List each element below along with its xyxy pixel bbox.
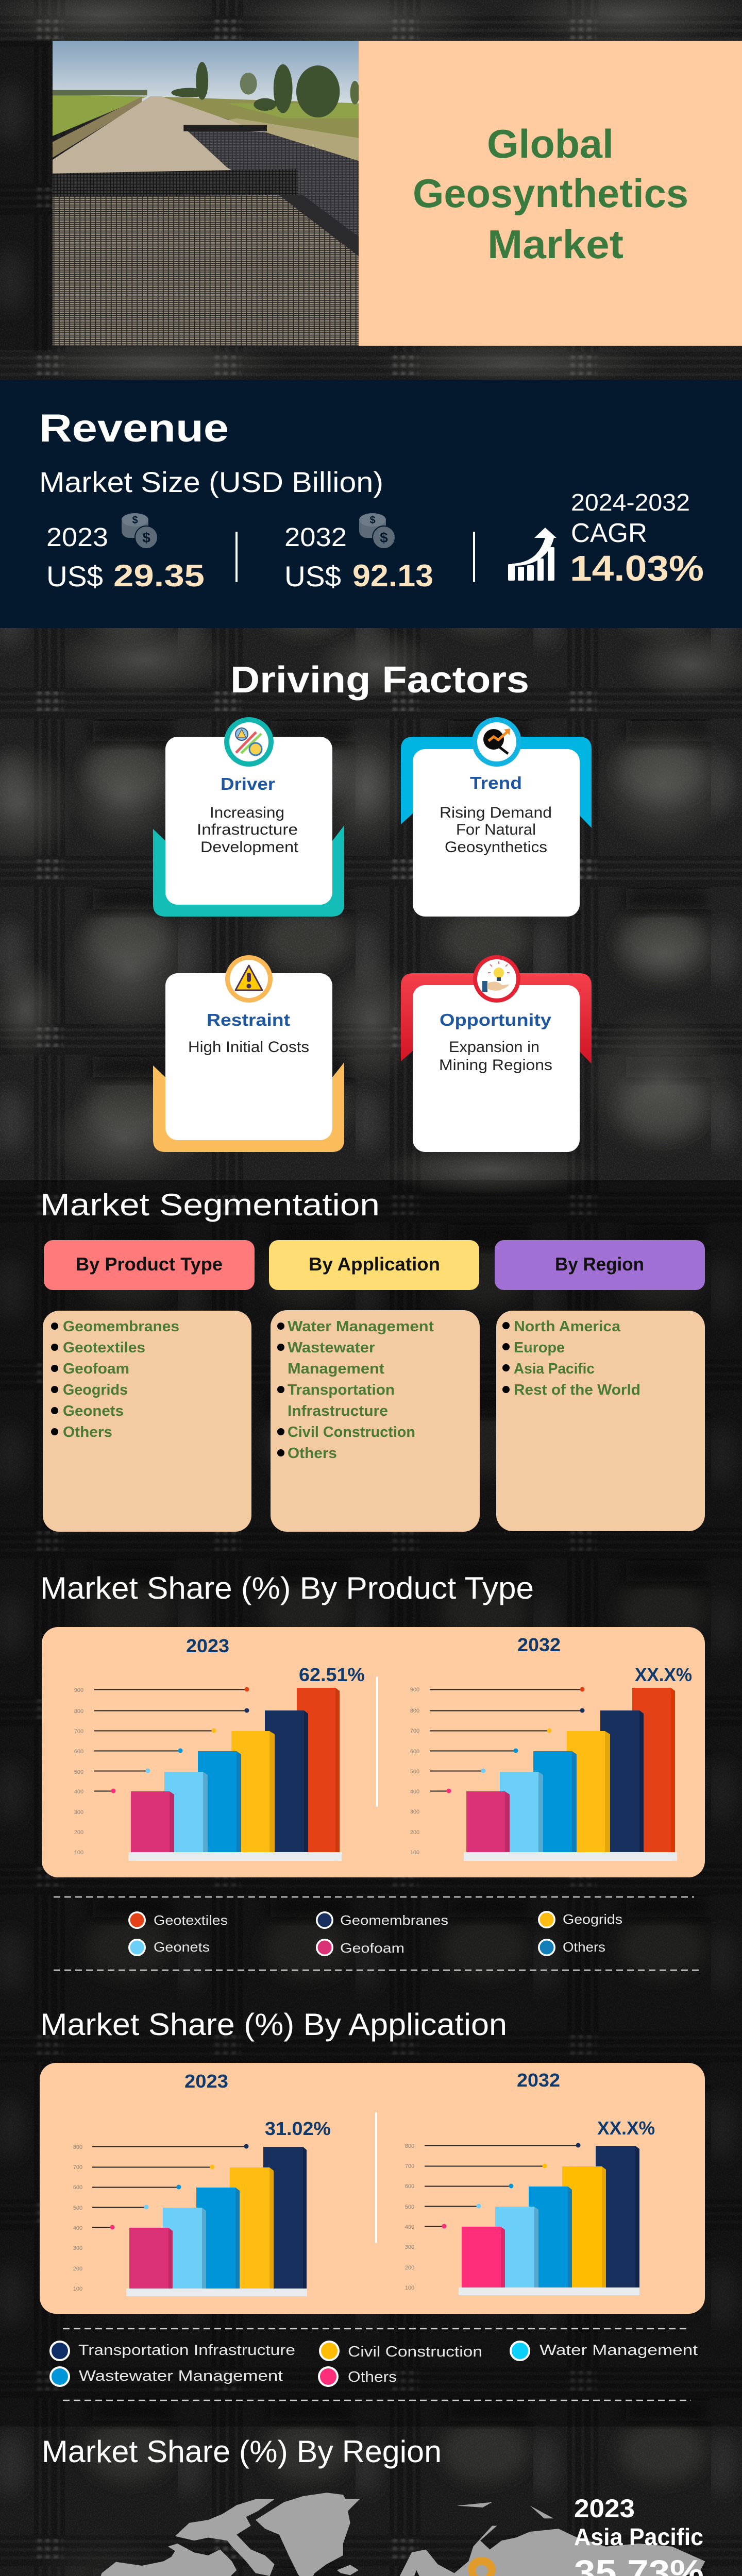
chart: product type 2032: 200 <box>410 1829 419 1836</box>
legend: product type <box>128 1911 622 1956</box>
stat: CAGR <box>570 489 704 588</box>
chart: product type 2023: 500 <box>74 1769 83 1775</box>
text: opportunity description: Mining Regions <box>439 1057 552 1074</box>
header panel: peach title block <box>359 41 742 346</box>
legend: application: Water Management <box>539 2342 698 2359</box>
list panel: applications: Civil Construction <box>288 1424 415 1440</box>
chart: application 2023: 300 <box>73 2245 82 2251</box>
list panel: applications: Water Management <box>288 1318 434 1335</box>
stat: CAGR: 14.03% <box>570 548 704 588</box>
title: Market <box>487 222 623 267</box>
list panel: applications: Transportation <box>288 1382 395 1398</box>
text: restraint description: High Initial Costs <box>188 1039 309 1056</box>
legend: product type: Geomembranes <box>340 1912 448 1928</box>
chart: product type 2032 <box>410 1634 692 1861</box>
heading: revenue: Revenue <box>39 406 229 450</box>
panel: application charts <box>40 2063 705 2314</box>
text: trend description <box>440 804 552 856</box>
chart: application 2032: 2032 <box>517 2070 560 2091</box>
text: trend description: Rising Demand <box>440 804 552 821</box>
icon: coins <box>122 513 158 549</box>
stat: 2032 revenue <box>284 513 433 593</box>
pin: europe <box>468 2557 496 2576</box>
chart: application 2023: 100 <box>73 2286 82 2292</box>
card: driver <box>153 717 344 917</box>
list panel: regions: North America <box>514 1318 621 1335</box>
heading: market share by product type: Market Share (%) By Product Type <box>40 1571 534 1605</box>
chart: application 2032: 700 <box>405 2163 414 2170</box>
list panel: product types: Geonets <box>63 1403 124 1419</box>
chart: application 2032: 100 <box>405 2285 414 2291</box>
title: Geosynthetics <box>413 171 688 216</box>
list panel: product types: Geofoam <box>63 1361 129 1377</box>
icon: driver gears and arrows <box>224 717 274 767</box>
text: driver description: Development <box>200 839 299 856</box>
legend: application: Civil Construction <box>348 2344 482 2360</box>
legend: product type: Others <box>563 1939 605 1955</box>
chart: application 2023: 800 <box>73 2144 82 2150</box>
text: trend description: For Natural <box>456 821 536 838</box>
chart: product type 2032: 500 <box>410 1769 419 1775</box>
legend: application: Transportation Infrastructure <box>78 2342 295 2359</box>
callout: asia pacific share <box>574 2494 704 2576</box>
chart: product type 2023: 800 <box>74 1708 83 1715</box>
text: opportunity description: Expansion in <box>449 1039 539 1056</box>
chart: product type 2032: 900 <box>410 1687 419 1693</box>
chart: application 2023: 400 <box>73 2225 82 2231</box>
text: driver description: Increasing <box>210 804 284 821</box>
panel: product type charts <box>42 1627 705 1877</box>
tab: by product type: By Product Type <box>76 1253 223 1275</box>
chart: product type 2023 <box>74 1635 365 1861</box>
legend: product type: Geonets <box>154 1939 210 1955</box>
title: Global <box>487 121 614 166</box>
heading: driver: Driver <box>221 774 275 793</box>
icon: coins: $ <box>380 530 388 546</box>
list panel: regions: Rest of the World <box>514 1382 640 1398</box>
text: driver description: Infrastructure <box>197 821 298 838</box>
icon: warning triangle <box>225 955 273 1003</box>
title <box>413 121 688 267</box>
icon: coins: $ <box>369 515 376 526</box>
chart: application 2032 <box>405 2070 655 2295</box>
text: opportunity description <box>439 1039 552 1074</box>
list panel: regions: Europe <box>514 1340 565 1356</box>
list panel: product types: Geogrids <box>63 1382 128 1398</box>
text: driver description <box>197 804 299 856</box>
legend: application <box>49 2341 698 2387</box>
list panel: regions: Asia Pacific <box>514 1361 595 1377</box>
chart: product type 2023: 200 <box>74 1829 83 1836</box>
list panel: applications: Wastewater <box>288 1340 375 1356</box>
chart: application 2023: 600 <box>73 2184 82 2191</box>
chart: application 2023: 2023 <box>184 2071 228 2092</box>
chart: product type 2032: 700 <box>410 1728 419 1734</box>
chart: product type 2023: 700 <box>74 1728 83 1735</box>
chart: product type 2023: 600 <box>74 1749 83 1755</box>
chart: application 2032: 400 <box>405 2224 414 2230</box>
callout: asia pacific share: 2023 <box>574 2494 635 2523</box>
legend: product type: Geotextiles <box>154 1912 228 1928</box>
hero photo: geogrid being rolled out on a road <box>53 41 360 346</box>
icon: trend magnifier <box>472 717 521 767</box>
heading: restraint: Restraint <box>207 1010 290 1029</box>
chart: product type 2023: 900 <box>74 1687 83 1693</box>
tab: by product type <box>44 1240 255 1290</box>
heading: driving factors: Driving Factors <box>230 659 529 701</box>
subheading: market size: Market Size (USD Billion) <box>39 466 383 498</box>
chart: application 2023: 700 <box>73 2164 82 2171</box>
icon: growth chart with arrow <box>508 528 556 581</box>
list panel: product types: Geomembranes <box>63 1318 179 1335</box>
chart: product type 2032: 400 <box>410 1789 419 1795</box>
heading: market share by application: Market Share (%) By Application <box>40 2007 507 2042</box>
chart: application 2023 <box>73 2071 331 2296</box>
stat: 2032 revenue: 92.13 <box>352 558 433 593</box>
chart: product type 2023: 300 <box>74 1809 83 1816</box>
list panel: product types: Others <box>63 1424 112 1440</box>
text: trend description: Geosynthetics <box>445 839 547 856</box>
stat: 2023 revenue: 29.35 <box>113 558 205 593</box>
icon: coins: $ <box>142 530 150 546</box>
legend: product type: Geogrids <box>563 1911 622 1927</box>
heading: market segmentation: Market Segmentation <box>40 1188 380 1222</box>
stat: 2032 revenue: US$ <box>284 560 341 592</box>
list panel: regions <box>496 1311 705 1531</box>
stat: 2023 revenue: US$ <box>46 560 103 592</box>
stat: CAGR: CAGR <box>571 518 647 548</box>
list panel: product types <box>43 1311 251 1532</box>
card: opportunity <box>401 955 592 1152</box>
chart: application 2032: 300 <box>405 2244 414 2250</box>
world map <box>99 2493 705 2576</box>
stat: 2032 revenue: 2032 <box>284 522 347 552</box>
chart: product type 2032: 800 <box>410 1708 419 1714</box>
list panel: applications <box>271 1310 480 1532</box>
chart: application 2032: 200 <box>405 2265 414 2271</box>
tab: by region: By Region <box>555 1253 644 1275</box>
revenue band <box>0 380 742 628</box>
list panel: applications: Infrastructure <box>288 1403 388 1419</box>
chart: product type 2023: 2023 <box>186 1635 229 1656</box>
stat: 2023 revenue: 2023 <box>46 522 108 552</box>
chart: application 2023: 500 <box>73 2205 82 2211</box>
icon: hand with lightbulb <box>473 955 520 1003</box>
chart: product type 2023: 400 <box>74 1789 83 1795</box>
tab: by region <box>495 1240 705 1290</box>
chart: application 2023: 200 <box>73 2266 82 2272</box>
chart: product type 2023: 100 <box>74 1850 83 1856</box>
stat: 2023 revenue <box>46 513 205 593</box>
list panel: applications: Management <box>288 1361 384 1377</box>
callout: asia pacific share: Asia Pacific <box>574 2523 703 2550</box>
icon: coins <box>359 513 395 549</box>
chart: product type 2032: 100 <box>410 1850 419 1856</box>
chart: application 2032: 500 <box>405 2204 414 2210</box>
chart: product type 2032: 600 <box>410 1749 419 1755</box>
chart: application 2023: 31.02% <box>265 2118 331 2139</box>
chart: product type 2023: 62.51% <box>299 1664 365 1685</box>
heading: market share by region: Market Share (%) By Region <box>42 2434 442 2469</box>
chart: application 2032: 800 <box>405 2143 414 2149</box>
chart: application 2032: XX.X% <box>597 2117 655 2139</box>
list panel: applications: Others <box>288 1445 337 1462</box>
tab: by application <box>269 1240 479 1290</box>
chart: product type 2032: 2032 <box>517 1634 561 1655</box>
card: restraint <box>153 955 344 1152</box>
legend: product type: Geofoam <box>340 1940 404 1956</box>
icon: coins: $ <box>132 515 138 526</box>
heading: opportunity: Opportunity <box>440 1010 552 1029</box>
chart: product type 2032: 300 <box>410 1809 419 1815</box>
chart: product type 2032: XX.X% <box>635 1664 692 1685</box>
chart: application 2032: 600 <box>405 2183 414 2190</box>
tab: by application: By Application <box>309 1253 440 1275</box>
legend: application: Wastewater Management <box>79 2368 283 2384</box>
heading: trend: Trend <box>470 773 522 792</box>
stat: CAGR: 2024-2032 <box>571 489 690 516</box>
legend: application: Others <box>348 2369 397 2385</box>
card: trend <box>401 717 592 917</box>
list panel: product types: Geotextiles <box>63 1340 145 1356</box>
